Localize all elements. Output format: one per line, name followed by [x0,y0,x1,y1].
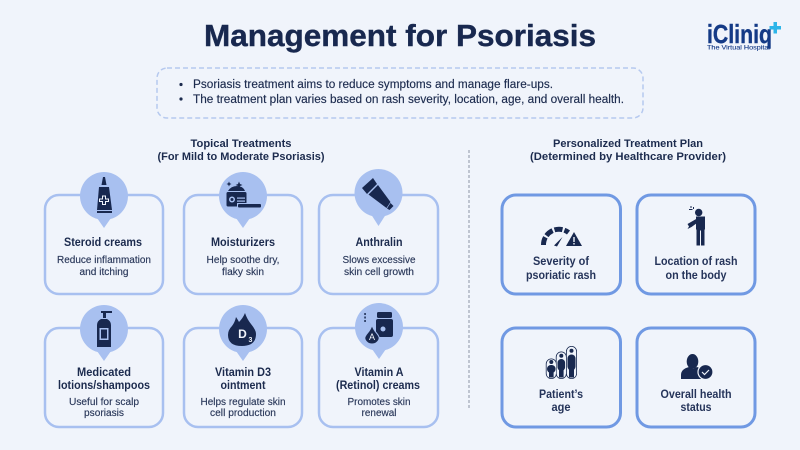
title: Management for Psoriasis [204,18,596,53]
heading: personalized treatment plan: Personalized Treatment Plan [553,138,703,150]
icon: three people of growing height [547,349,576,378]
card: vitamin A creams: renewal [362,408,396,419]
heading: topical treatments: Topical Treatments [190,138,292,150]
card: patient's age: Patient’s [539,389,583,401]
intro callout: The treatment plan varies based on rash severity, location, age, and overall health. [193,94,624,106]
intro callout [157,68,643,118]
card: patient's age: age [552,402,570,414]
card: medicated lotions: Medicated [77,367,131,379]
card: overall health status: status [680,402,712,414]
card: severity of rash [502,195,620,294]
heading: personalized treatment plan [530,138,726,163]
card: vitamin D3 ointment: Helps regulate skin [200,397,286,408]
card: medicated lotions: lotions/shampoos [58,380,150,392]
heading: topical treatments: (For Mild to Moderate Psoriasis) [158,151,325,163]
heading: topical treatments [158,138,325,163]
logo: iCliniq: The Virtual Hospital [707,44,770,52]
card: moisturizers [184,172,302,294]
icon: ointment tube [97,177,112,213]
card: moisturizers: Moisturizers [211,237,275,249]
card: vitamin D3 ointment [184,305,302,427]
card: location of rash: Location of rash [654,256,738,268]
card: anthralin: Slows excessive [342,255,416,266]
icon: retinol jar and drop: A [369,332,375,342]
icon: gauge with warning [543,229,582,246]
card: vitamin D3 ointment: Vitamin D3 [215,367,271,379]
card: anthralin [319,169,438,294]
card: vitamin A creams [319,303,438,427]
icon: cream jar [226,182,262,208]
card: steroid creams: Reduce inflammation [57,255,151,266]
card: moisturizers: flaky skin [222,267,264,278]
icon: D3 drops: D [238,327,247,341]
card: severity of rash: psoriatic rash [526,270,596,282]
icon: person with check badge [681,354,713,380]
card: location of rash: on the body [666,270,727,282]
icon: pump bottle [97,311,112,347]
card: vitamin D3 ointment: cell production [210,408,276,419]
icon: tube [362,178,394,210]
card: medicated lotions: Useful for scalp [69,397,139,408]
card: vitamin A creams: Promotes skin [348,397,410,408]
card: anthralin: Anthralin [356,237,402,249]
card: vitamin A creams: (Retinol) creams [336,380,420,392]
card: medicated lotions [45,305,163,427]
card: severity of rash: Severity of [533,256,589,268]
card: location of rash [637,195,755,294]
icon: person scratching [688,206,705,246]
card: overall health status [637,328,755,427]
card: steroid creams: Steroid creams [64,237,142,249]
icon: D3 drops [228,313,256,346]
card: steroid creams: and itching [80,267,128,278]
card: steroid creams [45,172,163,294]
card: patient's age [502,328,620,427]
card: anthralin: skin cell growth [344,267,414,278]
heading: personalized treatment plan: (Determined by Healthcare Provider) [530,151,726,163]
icon: D3 drops: 3 [249,337,253,344]
card: vitamin A creams: Vitamin A [354,367,404,379]
intro callout: Psoriasis treatment aims to reduce symptoms and manage flare-ups. [193,79,553,91]
card: moisturizers: Help soothe dry, [206,255,280,266]
card: medicated lotions: psoriasis [84,408,124,419]
card: vitamin D3 ointment: ointment [220,380,266,392]
card: overall health status: Overall health [660,389,732,401]
logo: iCliniq: iCliniq [707,19,772,49]
